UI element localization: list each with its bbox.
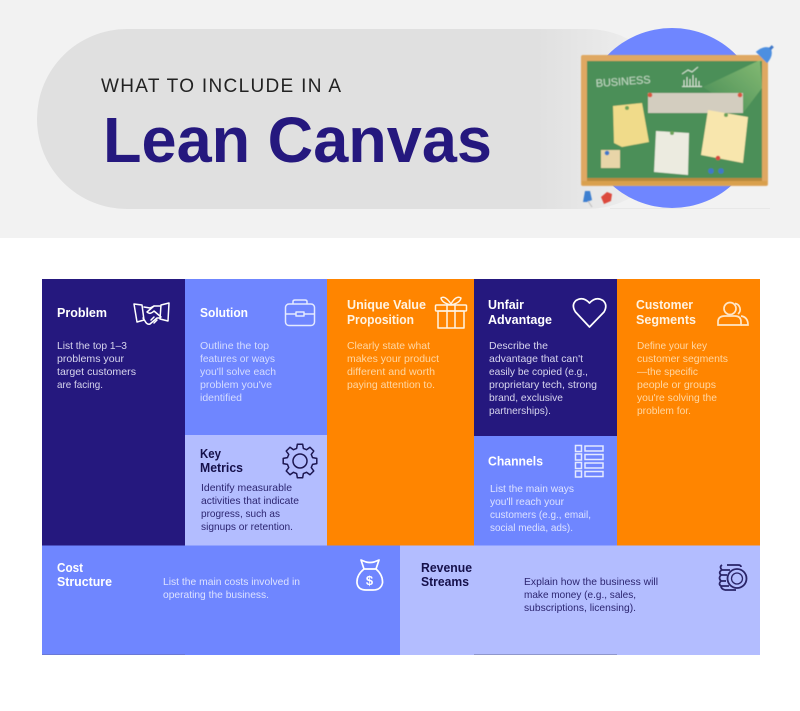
floor shadow <box>610 208 770 209</box>
problem body text: problems your <box>57 353 125 365</box>
customer segments body text: people or groups <box>637 379 716 391</box>
panel: unique value proposition <box>327 279 474 546</box>
header band <box>0 0 800 238</box>
unique value proposition body text: makes your product <box>347 353 439 365</box>
solution body text: features or ways <box>200 353 275 365</box>
unfair advantage body text: partnerships). <box>489 405 551 417</box>
heading: customer segments: Customer <box>636 298 693 312</box>
illustration: bulletin board <box>581 28 778 209</box>
panel: revenue streams <box>400 546 760 655</box>
heading: channels: Channels <box>488 454 543 468</box>
icon: users <box>718 302 748 325</box>
heading: unique value proposition: Unique Value <box>347 298 426 312</box>
cost structure body text: operating the business. <box>163 589 269 601</box>
heading: key metrics: Key <box>200 447 221 461</box>
heading: key metrics <box>200 447 243 475</box>
cost structure body text: List the main costs involved in <box>163 576 300 588</box>
heading: customer segments: Segments <box>636 313 696 327</box>
heading: cost structure: Cost <box>57 561 84 575</box>
panel: channels <box>474 436 617 546</box>
customer segments body text: customer segments <box>637 353 728 365</box>
icon: briefcase <box>286 300 314 326</box>
key metrics body text: progress, such as <box>201 508 280 520</box>
unique value proposition body text: different and worth <box>347 366 435 378</box>
problem body text: List the top 1–3 <box>57 340 127 352</box>
channels body text: List the main ways <box>490 483 574 495</box>
icon: money bag <box>357 560 383 590</box>
key metrics body text: Identify measurable <box>201 482 292 494</box>
heading: unfair advantage: Advantage <box>488 313 552 327</box>
heading: revenue streams: Revenue <box>421 561 472 575</box>
unique value proposition body text: paying attention to. <box>347 379 435 391</box>
solution body text: you'll solve each <box>200 366 276 378</box>
heading: key metrics: Metrics <box>200 461 243 475</box>
revenue streams body text: subscriptions, licensing). <box>524 602 636 614</box>
revenue streams body text: make money (e.g., sales, <box>524 589 636 601</box>
main title: Lean Canvas <box>103 104 492 176</box>
customer segments body text <box>637 340 728 417</box>
header pill <box>37 29 677 209</box>
heading: customer segments <box>636 298 696 327</box>
customer segments body text: problem for. <box>637 405 691 417</box>
heading: unique value proposition: Proposition <box>347 313 414 327</box>
lamp <box>756 41 778 63</box>
chalk chart doodle <box>682 67 702 86</box>
icon: list <box>576 446 603 477</box>
channels body text: social media, ads). <box>490 522 573 534</box>
panel: problem <box>42 279 185 546</box>
blue circle backdrop <box>582 28 762 208</box>
white note <box>654 131 689 175</box>
cream note <box>701 110 748 163</box>
heading: unfair advantage <box>488 298 552 327</box>
customer segments body text: —the specific <box>637 366 698 378</box>
customer segments body text: you're solving the <box>637 392 717 404</box>
heading: revenue streams: Streams <box>421 575 469 589</box>
icon: money bag: $ <box>366 573 374 588</box>
icon: gift box <box>436 297 466 328</box>
unfair advantage body text: advantage that can't <box>489 353 583 365</box>
solution body text: Outline the top <box>200 340 269 352</box>
unfair advantage body text <box>489 340 597 417</box>
unfair advantage body text: easily be copied (e.g., <box>489 366 588 378</box>
unfair advantage body text: Describe the <box>489 340 548 352</box>
panel: cost structure <box>42 546 400 655</box>
panel: key metrics <box>185 435 327 546</box>
cost structure body text <box>163 576 300 601</box>
panel: unfair advantage <box>474 279 617 437</box>
solution body text: identified <box>200 392 242 404</box>
unique value proposition body text <box>347 340 439 391</box>
problem body text <box>57 340 136 391</box>
eyebrow heading: WHAT TO INCLUDE IN A <box>101 76 341 97</box>
problem body text: target customers <box>57 366 136 378</box>
customer segments body text: Define your key <box>637 340 708 352</box>
channels body text: you'll reach your <box>490 496 564 508</box>
revenue streams body text: Explain how the business will <box>524 576 658 588</box>
revenue streams body text <box>524 576 658 614</box>
board label: BUSINESS <box>595 74 651 90</box>
channels body text: customers (e.g., email, <box>490 509 591 521</box>
push pins on floor <box>583 191 612 207</box>
canvas grid <box>42 279 760 655</box>
unique value proposition body text: Clearly state what <box>347 340 430 352</box>
problem body text: are facing. <box>57 379 103 391</box>
channels body text <box>490 483 591 534</box>
panel: solution <box>185 279 327 436</box>
heading: solution: Solution <box>200 306 248 320</box>
icon: coins <box>720 565 746 590</box>
board frame <box>581 55 768 186</box>
yellow note <box>613 103 649 147</box>
solution body text: problem you've <box>200 379 272 391</box>
paper banner <box>648 93 743 113</box>
icon: heart <box>573 299 606 327</box>
solution body text <box>200 340 276 404</box>
icon: gear <box>283 444 317 478</box>
heading: unique value proposition <box>347 298 426 327</box>
heading: revenue streams <box>421 561 472 589</box>
heading: cost structure: Structure <box>57 575 112 589</box>
icon: handshake <box>134 303 169 324</box>
key metrics body text: signups or retention. <box>201 521 293 533</box>
unfair advantage body text: brand, exclusive <box>489 392 563 404</box>
heading: problem: Problem <box>57 306 107 320</box>
board artwork <box>581 41 778 207</box>
pins <box>605 93 742 174</box>
key metrics body text: activities that indicate <box>201 495 299 507</box>
panel: customer segments <box>617 279 760 546</box>
heading: unfair advantage: Unfair <box>488 298 524 312</box>
heading: cost structure <box>57 561 112 589</box>
unfair advantage body text: proprietary tech, strong <box>489 379 597 391</box>
small note <box>601 150 620 168</box>
key metrics body text <box>201 482 299 533</box>
